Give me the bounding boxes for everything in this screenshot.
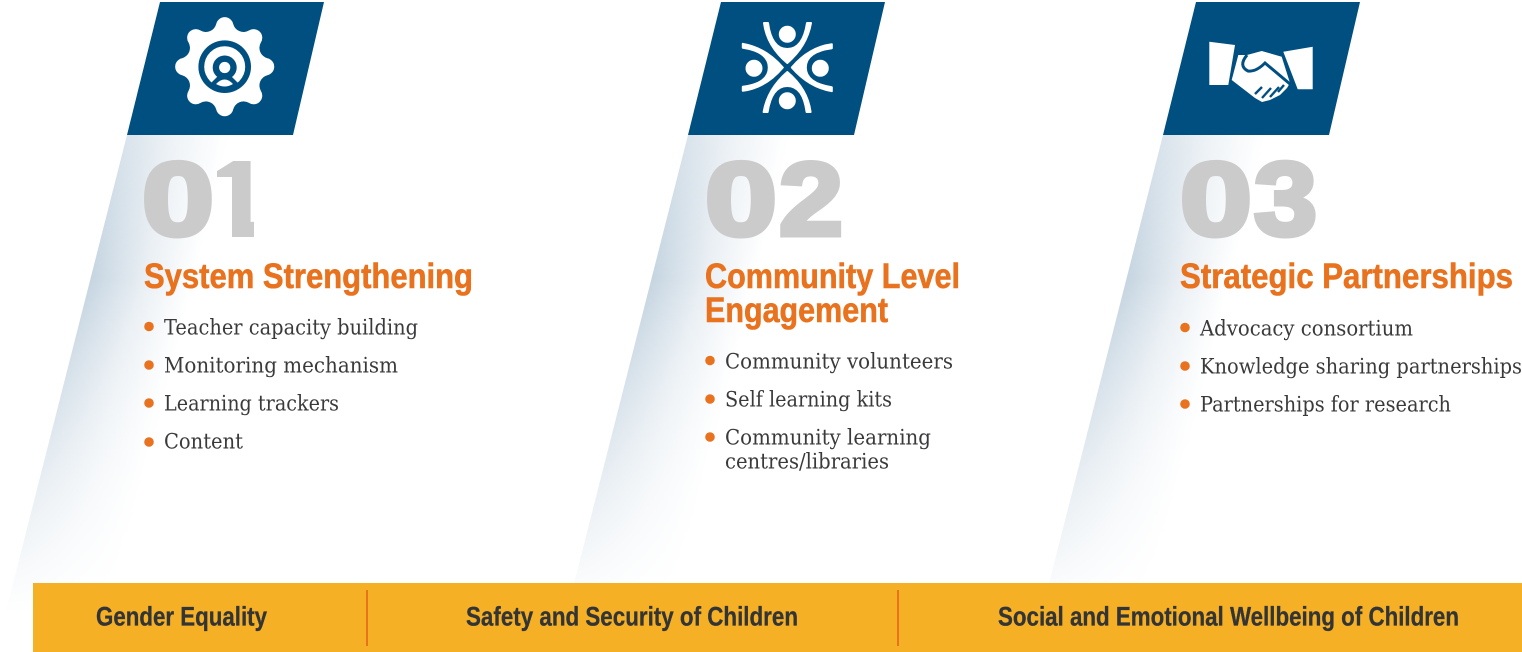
number: 0	[705, 142, 777, 258]
gradient shadow band	[1054, 135, 1238, 565]
heading: Community Level	[705, 257, 960, 296]
icon tile	[1163, 2, 1360, 135]
number: 0	[1180, 142, 1252, 258]
bullet list: Content	[164, 430, 244, 454]
bullet list: Advocacy consortium	[1199, 316, 1413, 340]
bullet list: Community learning	[725, 426, 931, 450]
bullet list	[1180, 316, 1522, 416]
bottom banner	[33, 583, 1522, 652]
number: 3	[1254, 142, 1317, 258]
gradient shadow band	[18, 135, 202, 565]
bullet list: centres/libraries	[725, 450, 889, 474]
banner text: safety: Safety and Security of Children	[466, 602, 798, 632]
icon: gear with person	[175, 17, 274, 116]
bullet list	[705, 350, 953, 474]
number: 2	[779, 142, 843, 258]
gradient shadow band	[579, 135, 762, 565]
icon: handshake	[1209, 42, 1313, 102]
bullet list: Teacher capacity building	[164, 316, 418, 340]
bullet list: Self learning kits	[725, 388, 892, 412]
bullet list: Community volunteers	[725, 350, 953, 374]
heading: System Strengthening	[144, 257, 473, 296]
column 2: Community Level Engagement	[579, 2, 958, 565]
icon: four people	[743, 23, 832, 112]
heading	[705, 257, 960, 330]
number	[1180, 142, 1317, 258]
bullet list: Monitoring mechanism	[164, 354, 398, 378]
number	[144, 160, 254, 238]
number	[705, 142, 843, 258]
bullet list: Partnerships for research	[1200, 392, 1451, 416]
icon tile	[127, 2, 324, 135]
column 1: System Strengthening	[18, 2, 472, 565]
number: 0	[142, 142, 214, 258]
bullet list: Learning trackers	[164, 392, 339, 416]
bullet list	[144, 316, 418, 454]
banner text: gender: Gender Equality	[96, 602, 267, 632]
number: 1	[208, 142, 268, 258]
heading: Engagement	[705, 291, 888, 330]
column 3: Strategic Partnerships	[1054, 2, 1521, 565]
icon tile	[688, 2, 885, 135]
